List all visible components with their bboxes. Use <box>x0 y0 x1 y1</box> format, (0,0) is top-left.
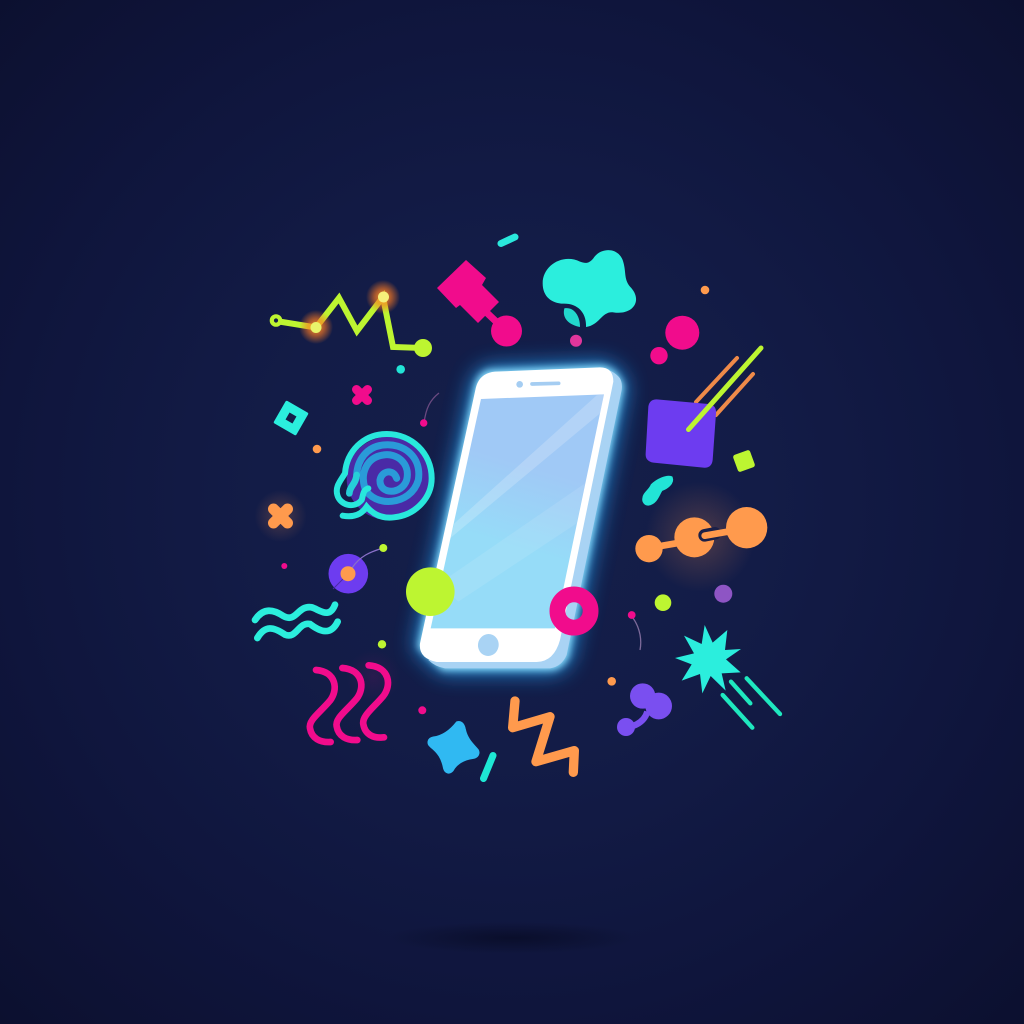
purple clover <box>617 683 672 736</box>
orange streaks <box>696 358 753 415</box>
speaker <box>532 378 559 389</box>
pink circle small <box>650 347 668 364</box>
pink tool shape <box>437 260 522 346</box>
pink dot bottom <box>418 706 426 714</box>
ground shadow <box>387 922 637 954</box>
pink dot small left <box>281 563 287 569</box>
chart start ring <box>272 316 280 325</box>
blue star <box>428 722 479 773</box>
lime dot lower left <box>378 640 386 648</box>
leaf <box>564 308 580 327</box>
camera dot <box>516 381 523 388</box>
cyan dot <box>396 365 405 374</box>
phone glow <box>420 367 622 668</box>
lime dot right <box>655 594 671 611</box>
teal waves <box>255 605 338 638</box>
teal small blob <box>643 477 672 505</box>
teal dash top <box>501 237 515 244</box>
orange dumbbell <box>635 482 767 592</box>
lime big circle <box>406 567 455 616</box>
orange dot top right <box>701 286 709 294</box>
home button <box>476 632 501 658</box>
glowing node left <box>299 310 333 344</box>
phone side buttons <box>598 432 611 479</box>
line chart squiggle <box>272 280 432 357</box>
purple orbit circle <box>328 544 387 594</box>
pink dot with curve <box>420 393 439 427</box>
pink cross <box>356 390 368 400</box>
chart end dot <box>414 339 432 357</box>
orange dot lower right <box>607 677 616 686</box>
orange cross with glow <box>254 490 306 542</box>
teal starburst <box>675 625 741 693</box>
lime streak <box>688 348 761 430</box>
pink dot with arc <box>628 611 641 650</box>
lime small square <box>732 449 756 473</box>
spiral fingerprint <box>337 434 432 520</box>
pink squiggles <box>310 650 400 742</box>
motion lines <box>723 678 780 728</box>
phone front body <box>420 367 613 662</box>
phone <box>420 367 622 668</box>
teal bar bottom <box>484 756 493 778</box>
purple rounded square <box>646 399 716 468</box>
screen reflections <box>439 394 604 602</box>
pink circle large <box>665 316 699 350</box>
orange zigzag <box>513 701 574 772</box>
glowing node right <box>366 280 400 314</box>
pink ring <box>557 594 591 628</box>
teal blob <box>543 250 636 327</box>
pink dot under blob <box>570 335 582 347</box>
phone back edge <box>428 368 622 668</box>
purple dot right <box>714 585 732 603</box>
orange dot left <box>313 445 321 453</box>
phone screen <box>431 394 604 628</box>
teal diamond <box>273 400 309 436</box>
